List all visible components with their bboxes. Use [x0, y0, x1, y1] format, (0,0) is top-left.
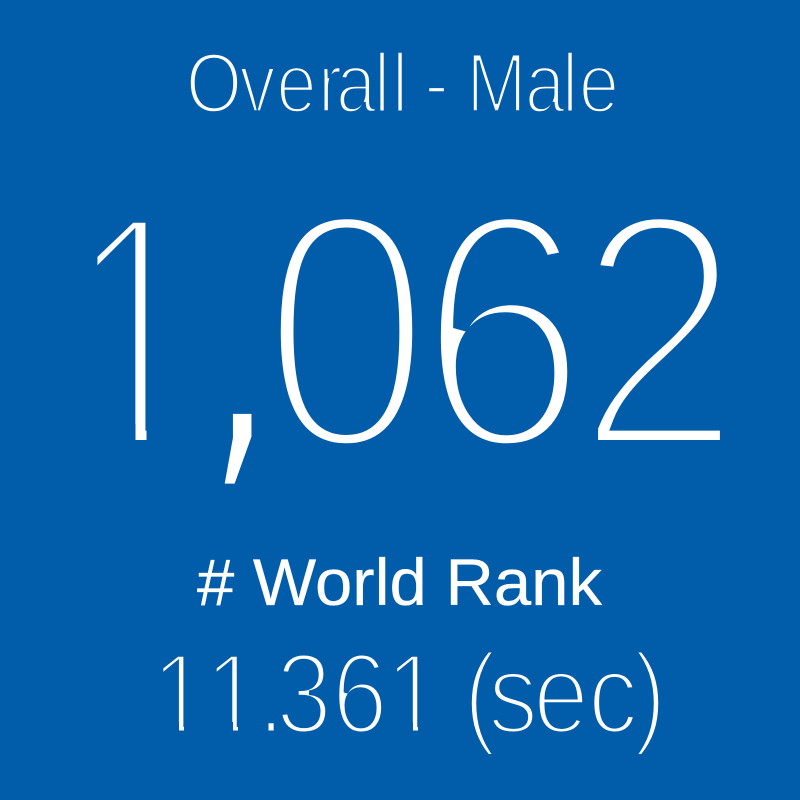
big number: 1,062: 2: [576, 141, 742, 520]
big number: 1,062: 1: [68, 142, 204, 520]
big number: 1,062: ,: [205, 159, 275, 525]
heading: Overall - Male: Overall - Male: [186, 36, 619, 130]
big number: 1,062: 6: [418, 142, 588, 521]
value: 11.361 (sec): 11.361 (sec): [151, 630, 667, 757]
big number: 1,062: 0: [262, 142, 431, 521]
label: # World Rank: # World Rank: [197, 545, 603, 619]
big number: 1,062: [68, 141, 742, 525]
